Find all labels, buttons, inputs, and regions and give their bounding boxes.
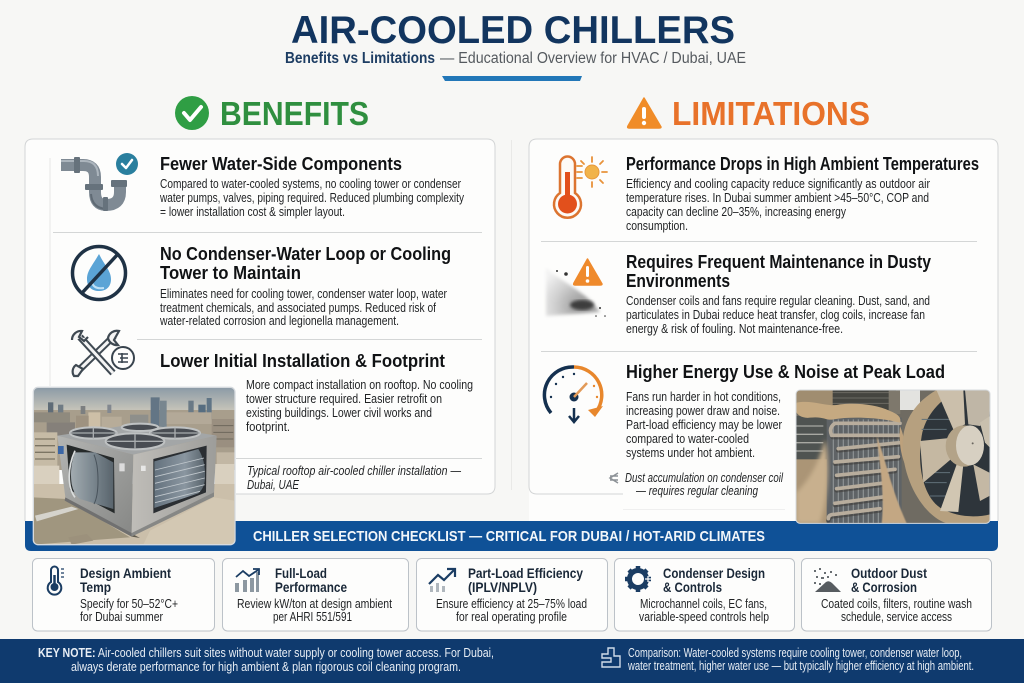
photo caption: Typical rooftop air-cooled chiller installation — [247,463,462,478]
checklist card: design ambient temp [32,558,214,631]
card text: Specify for 50–52°C+ [80,596,178,611]
body text: particulates in Dubai reduce heat transfer, clog coils, increase fan [626,307,925,322]
card text: Review kW/ton at design ambient [237,596,392,611]
key note: KEY NOTE: Air-cooled chillers suit sites without water supply or cooling tower access. For Dubai, [38,645,494,660]
body text: treatment chemicals, and associated pumps. Reduced risk of [160,300,436,315]
card heading [851,566,927,595]
key note: always derate performance for high ambient & plan rigorous coil cleaning program. [71,659,461,674]
icon: crossed-out water drop [72,246,126,300]
title accent bar [442,76,582,81]
card text [436,596,587,624]
card heading [275,566,347,595]
key note [38,645,494,674]
icon: line and bar chart [235,569,259,592]
subtitle: Benefits vs Limitations [285,50,435,67]
card heading: Outdoor Dust [851,566,927,581]
benefit item: no condenser-water loop [72,243,451,328]
body text: existing buildings. Lower civil works and [246,405,432,420]
card text: Coated coils, filters, routine wash [821,596,972,611]
fans [70,424,200,449]
title: AIR-COOLED CHILLERS [291,9,735,52]
checklist card: outdoor dust [802,558,992,631]
checklist banner: CHILLER SELECTION CHECKLIST — CRITICAL FOR DUBAI / HOT-ARID CLIMATES [253,528,765,545]
icon: pipe with check badge [61,153,138,211]
checklist card: part-load efficiency [416,558,608,631]
icon: warning triangle with dust [546,259,606,317]
card heading: Design Ambient [80,566,171,581]
body text: = lower installation cost & simpler layout. [160,204,345,219]
body text: water pumps, valves, piping required. Reduced plumbing complexity [159,190,464,205]
icon: small caption arrow [610,473,618,483]
photo caption [625,470,784,498]
card heading [468,566,583,595]
body text: Efficiency and cooling capacity reduce significantly as outdoor air [626,176,930,191]
card heading: & Controls [663,580,722,595]
heading [160,243,451,283]
body text: water-related corrosion and legionella management. [159,313,399,328]
heading: limitations: LIMITATIONS [672,95,870,132]
icon: gear [625,566,651,592]
body text: increasing power draw and noise. [626,403,780,418]
card text [821,596,972,624]
card heading: Part-Load Efficiency [468,566,583,581]
card heading: Performance [275,580,347,595]
checklist banner [25,521,998,551]
footer band [0,639,1024,683]
body text: temperature rises. In Dubai summer ambient >45–50°C, COP and [626,190,929,205]
card heading: Full-Load [275,566,327,581]
card heading: Condenser Design [663,566,765,581]
checklist card: full-load performance [222,558,408,631]
heading: benefits: BENEFITS [220,95,369,132]
subtitle [285,50,746,67]
body text: energy & risk of fouling. Not maintenance-free. [626,321,843,336]
body text: systems under hot ambient. [626,445,755,460]
body text [626,389,782,460]
panel: benefits [25,139,495,521]
icon: thermometer and sun [554,157,607,218]
icon: gauge [544,367,603,422]
body text: tower structure required. Easier retrofit on [246,391,442,406]
heading: Requires Frequent Maintenance in Dusty [626,251,932,272]
card heading [80,566,171,595]
body text: footprint. [246,419,290,434]
card text: Ensure efficiency at 25–75% load [436,596,587,611]
subtitle: — Educational Overview for HVAC / Dubai, UAE [440,50,746,67]
body text: consumption. [626,218,688,233]
body text [246,377,473,434]
photo caption: Dust accumulation on condenser coil [625,470,784,485]
body text [626,293,930,336]
heading: Lower Initial Installation & Footprint [160,350,445,371]
icon: crossed tools with coin [72,331,134,376]
heading: Environments [626,270,730,291]
comparison note [627,645,974,673]
benefit item: fewer water-side components [61,153,464,219]
icon: dust pile [814,568,841,592]
panel: limitations [529,139,998,521]
card text [80,596,178,624]
limitation item: high ambient temperatures [554,153,979,233]
body text: Condenser coils and fans require regular cleaning. Dust, sand, and [626,293,930,308]
card heading [663,566,765,595]
photo caption: Dubai, UAE [247,477,299,492]
card text: for Dubai summer [80,609,163,624]
chiller body [57,423,217,455]
card heading: (IPLV/NPLV) [468,580,537,595]
checklist card: condenser design [614,558,794,631]
card heading: Temp [80,580,111,595]
icon: thermometer [48,566,64,595]
card text [237,596,392,624]
body text: Fans run harder in hot conditions, [626,389,781,404]
body text: Compared to water-cooled systems, no cooling tower or condenser [160,176,461,191]
icon: rising trend chart [429,569,455,592]
body text: compared to water-cooled [626,431,749,446]
body text: Eliminates need for cooling tower, condenser water loop, water [160,286,447,301]
body text: capacity can decline 20–35%, increasing energy [626,204,846,219]
photo caption [247,463,462,492]
body text: More compact installation on rooftop. No cooling [246,377,473,392]
icon: system schematic [602,648,620,667]
heading: Tower to Maintain [160,262,301,283]
card heading: & Corrosion [851,580,917,595]
card text: variable-speed controls help [639,609,769,624]
fan [903,390,990,523]
body text [159,286,447,328]
card text: for real operating profile [456,609,567,624]
heading: Higher Energy Use & Noise at Peak Load [626,361,945,382]
photo: dust accumulation on condenser coil [796,390,990,523]
body text [159,176,464,219]
card text: per AHRI 551/591 [273,609,352,624]
limitation item: dusty environments [546,251,932,336]
limitation item: higher energy use [544,361,945,498]
heading: Fewer Water-Side Components [160,153,402,174]
photo: rooftop chiller in Dubai [33,387,235,545]
photo caption: — requires regular cleaning [635,483,758,498]
heading [626,251,932,291]
heading: No Condenser-Water Loop or Cooling [160,243,451,264]
benefit item: lower initial installation [72,331,473,492]
body text [626,176,930,233]
card text: schedule, service access [841,609,952,624]
body text: Part-load efficiency may be lower [626,417,782,432]
card text [639,596,769,624]
card text: Microchannel coils, EC fans, [640,596,767,611]
